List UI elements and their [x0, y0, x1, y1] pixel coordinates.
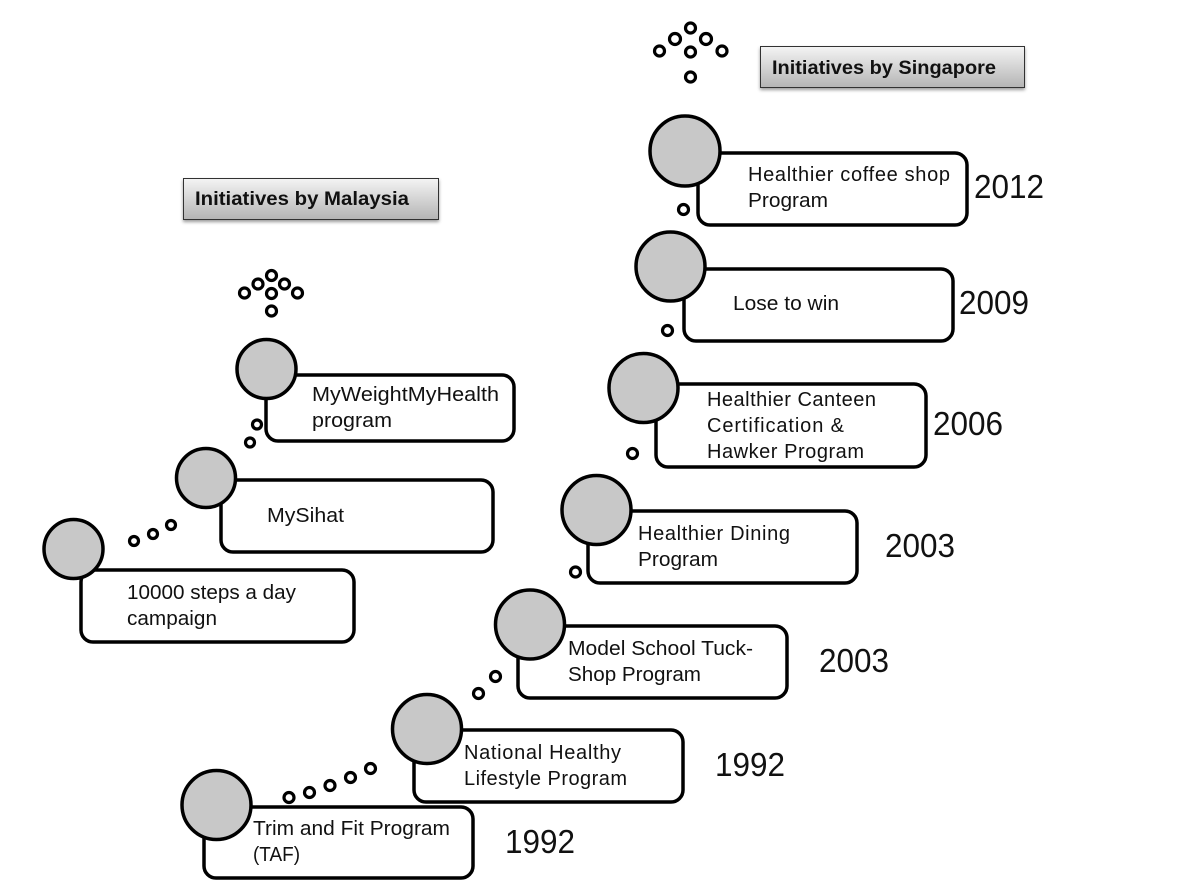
connector dots: 10000 steps to MySihat — [130, 520, 176, 546]
connector dot: Lose to win to Healthier coffee shop — [678, 204, 688, 214]
item: Healthier Canteen Certification and Hawker Program 2006: 2006 — [933, 405, 1003, 442]
item: Healthier coffee shop Program 2012 — [650, 116, 1044, 225]
item: MySihat — [176, 448, 493, 552]
item: Healthier coffee shop Program 2012: Program — [748, 190, 828, 212]
item: National Healthy Lifestyle Program 1992 — [392, 694, 785, 802]
connector dot: Healthier Dining to Healthier Canteen — [628, 448, 638, 458]
item: MyWeightMyHealth program: program — [312, 410, 392, 432]
item: MyWeightMyHealth program: MyWeightMyHealth — [312, 384, 499, 406]
item: 10000 steps a day campaign: campaign — [127, 608, 217, 630]
item: Lose to win 2009: 2009 — [959, 284, 1029, 321]
connector dots: National Healthy Lifestyle to Model School — [474, 672, 500, 698]
item: Model School Tuck-Shop Program 2003 — [496, 590, 889, 698]
item: Trim and Fit Program 1992: (TAF) — [253, 844, 300, 866]
item: Healthier Canteen Certification and Hawker Program 2006 — [609, 354, 1003, 467]
heading: Initiatives by Malaysia: Initiatives by Malaysia — [195, 188, 409, 210]
item: National Healthy Lifestyle Program 1992: 1992 — [715, 746, 785, 783]
item: Healthier Canteen Certification and Hawker Program 2006: Healthier Canteen — [707, 389, 876, 411]
item: Model School Tuck-Shop Program 2003: Model School Tuck- — [568, 638, 753, 660]
item: Lose to win 2009: Lose to win — [733, 293, 839, 315]
item: 10000 steps a day campaign — [44, 520, 354, 642]
item: Healthier coffee shop Program 2012: 2012 — [974, 168, 1044, 205]
connector dot: Healthier Canteen to Lose to win — [662, 326, 672, 336]
item: Healthier coffee shop Program 2012: Healthier coffee shop — [748, 164, 950, 186]
item: Model School Tuck-Shop Program 2003: 2003 — [819, 642, 889, 679]
item: National Healthy Lifestyle Program 1992: National Healthy — [464, 742, 621, 764]
item: MyWeightMyHealth program — [237, 340, 514, 441]
heading: Initiatives by Singapore — [760, 46, 1024, 88]
item: Healthier Dining Program 2003: Program — [638, 549, 718, 571]
connector dot: Model School to Healthier Dining — [570, 567, 580, 577]
item: Healthier Canteen Certification and Hawker Program 2006: Hawker Program — [707, 441, 864, 463]
item: Healthier Canteen Certification and Hawker Program 2006: Certification & — [707, 415, 845, 437]
item: Trim and Fit Program 1992 — [182, 770, 575, 878]
item: Healthier Dining Program 2003: 2003 — [885, 527, 955, 564]
heading: Initiatives by Singapore: Initiatives by Singapore — [772, 57, 996, 79]
item: Healthier Dining Program 2003: Healthier Dining — [638, 523, 790, 545]
item: Trim and Fit Program 1992: Trim and Fit Program — [253, 818, 450, 840]
item: Healthier Dining Program 2003 — [562, 476, 955, 583]
item: Model School Tuck-Shop Program 2003: Shop Program — [568, 664, 701, 686]
item: 10000 steps a day campaign: 10000 steps a day — [127, 582, 296, 604]
connector dots: Trim and Fit to National Healthy Lifestyle — [284, 764, 376, 802]
icon: Malaysia upward arrow of dots — [240, 270, 302, 316]
connector dots: MySihat to MyWeightMyHealth — [246, 438, 254, 447]
heading: Initiatives by Malaysia — [184, 178, 438, 220]
item: MySihat: MySihat — [267, 505, 344, 527]
icon: Singapore upward arrow of dots — [654, 23, 727, 82]
item: National Healthy Lifestyle Program 1992: Lifestyle Program — [464, 768, 627, 790]
item: Trim and Fit Program 1992: 1992 — [505, 823, 575, 860]
item: Lose to win 2009 — [636, 232, 1029, 341]
